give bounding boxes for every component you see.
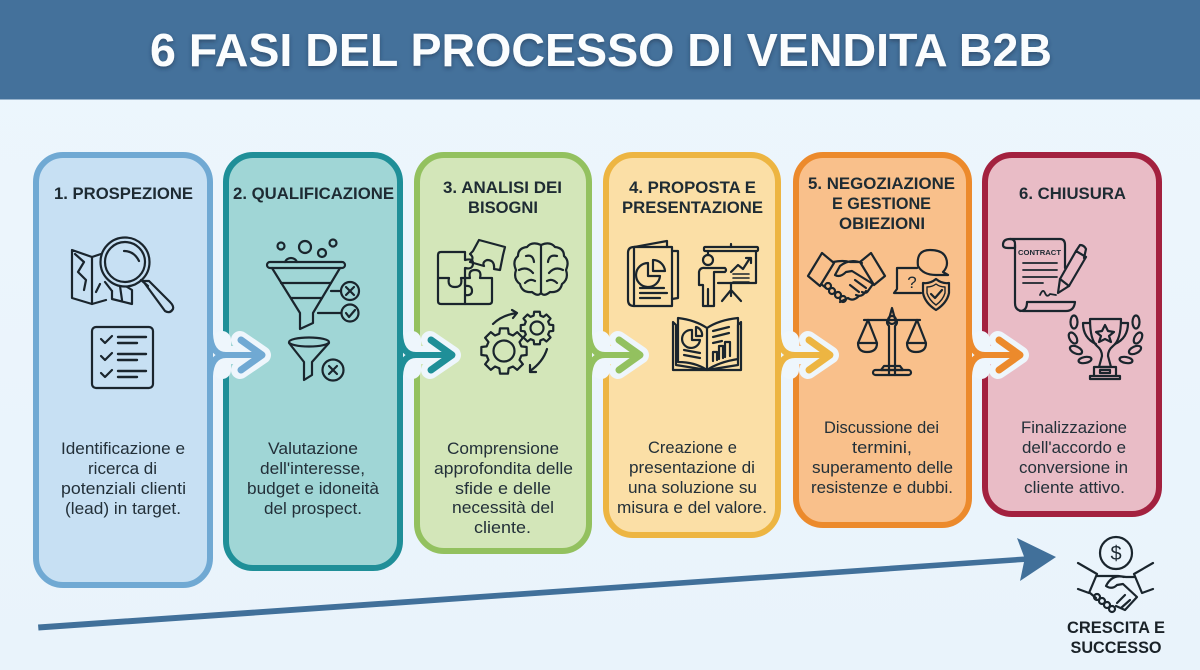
description: 5: termini, — [852, 439, 912, 457]
description: 3: approfondita delle — [434, 460, 573, 478]
description: 3: sfide e delle — [455, 480, 551, 498]
arrow: growth trend — [38, 538, 1056, 630]
description: 3 — [434, 440, 573, 537]
description: 6: Finalizzazione — [1021, 419, 1127, 437]
icon: trophy with laurels — [1067, 316, 1144, 379]
heading: 5. Negoziazione e gestione obiezioni — [808, 174, 955, 233]
description: 6: conversione in — [1019, 459, 1128, 477]
description: 4 — [617, 439, 767, 517]
description: 4: misura e del valore. — [617, 499, 767, 517]
description: 4: una soluzione su — [628, 479, 757, 497]
arrow: step 1 to 2 — [210, 334, 262, 376]
description: 6 — [1019, 419, 1128, 497]
arrow: step 3 to 4 — [589, 334, 640, 376]
heading: 4. Proposta e presentazione: PRESENTAZIONE — [622, 198, 763, 217]
description: 1: potenziali clienti — [61, 480, 186, 498]
heading: 1. Prospezione: 1. PROSPEZIONE — [54, 184, 193, 203]
arrow: step 2 to 3 — [400, 334, 452, 376]
panel: 3. Analisi dei bisogni — [417, 155, 589, 551]
description: 1: Identificazione e — [61, 440, 185, 458]
description: 5: Discussione dei — [824, 419, 939, 437]
icon: signed contract — [1003, 239, 1086, 311]
icon: gears — [481, 310, 553, 374]
description: 6: dell'accordo e — [1022, 439, 1126, 457]
label: crescita e successo: SUCCESSO — [1070, 639, 1162, 657]
heading: 3. Analisi dei bisogni — [443, 178, 562, 217]
heading: 4. Proposta e presentazione: 4. PROPOSTA E — [629, 178, 756, 197]
heading: 2. Qualificazione: 2. QUALIFICAZIONE — [233, 184, 394, 203]
icon: questions and shield: ? — [907, 273, 917, 292]
icon: coin and handshake — [1078, 537, 1153, 612]
description: 4: presentazione di — [629, 459, 755, 477]
description: 1 — [61, 440, 186, 518]
icon: handshake — [808, 253, 885, 302]
heading: 5. Negoziazione e gestione obiezioni: OBIEZIONI — [839, 214, 925, 233]
panel: 5. Negoziazione e gestione obiezioni — [796, 155, 969, 525]
title: 6 FASI DEL PROCESSO DI VENDITA B2B — [150, 24, 1052, 76]
description: 2: dell'interesse, — [260, 460, 365, 478]
arrow: step 4 to 5 — [778, 334, 830, 376]
icon: scales — [858, 308, 926, 375]
icon: report folder — [628, 241, 678, 306]
description: 6: cliente attivo. — [1024, 479, 1125, 497]
icon: brain — [514, 243, 568, 295]
description: 2: Valutazione — [268, 440, 358, 458]
icon: puzzle — [438, 240, 505, 304]
icon: small funnel — [289, 338, 344, 380]
icon: open book — [673, 318, 741, 370]
icon: map and magnifier — [72, 238, 173, 312]
icon: checklist — [92, 327, 153, 388]
heading: 5. Negoziazione e gestione obiezioni: E GESTIONE — [832, 194, 931, 213]
icon: signed contract: CONTRACT — [1018, 248, 1061, 257]
description: 2: budget e idoneità — [247, 480, 380, 498]
description: 1: ricerca di — [88, 460, 157, 478]
description: 1: (lead) in target. — [65, 500, 181, 518]
description: 3: cliente. — [474, 519, 531, 537]
header band — [0, 0, 1200, 100]
label: crescita e successo: CRESCITA E — [1067, 619, 1165, 637]
heading: 5. Negoziazione e gestione obiezioni: 5. NEGOZIAZIONE — [808, 174, 955, 193]
description: 4: Creazione e — [648, 439, 737, 457]
description: 3: necessità del — [452, 499, 554, 517]
icon: lead funnel — [267, 240, 359, 329]
heading: 6. Chiusura: 6. CHIUSURA — [1019, 184, 1126, 203]
description: 2: del prospect. — [264, 500, 362, 518]
icon: presenter with board — [699, 244, 758, 306]
icon: coin and handshake: $ — [1110, 543, 1122, 565]
arrow: step 5 to 6 — [969, 334, 1020, 376]
heading: 3. Analisi dei bisogni: 3. ANALISI DEI — [443, 178, 562, 197]
label: crescita e successo — [1067, 619, 1165, 657]
description: 5: superamento delle — [812, 459, 953, 477]
panel: 2. Qualificazione — [226, 155, 400, 568]
description: 5 — [811, 419, 953, 497]
icon: questions and shield — [894, 250, 949, 310]
description: 3: Comprensione — [447, 440, 559, 458]
description: 2 — [247, 440, 380, 518]
panel: 4. Proposta e presentazione — [606, 155, 778, 535]
panel: 6. Chiusura — [985, 155, 1159, 514]
panel: 1. Prospezione — [36, 155, 210, 585]
heading: 4. Proposta e presentazione — [622, 178, 763, 217]
heading: 3. Analisi dei bisogni: BISOGNI — [468, 198, 538, 217]
description: 5: resistenze e dubbi. — [811, 479, 953, 497]
